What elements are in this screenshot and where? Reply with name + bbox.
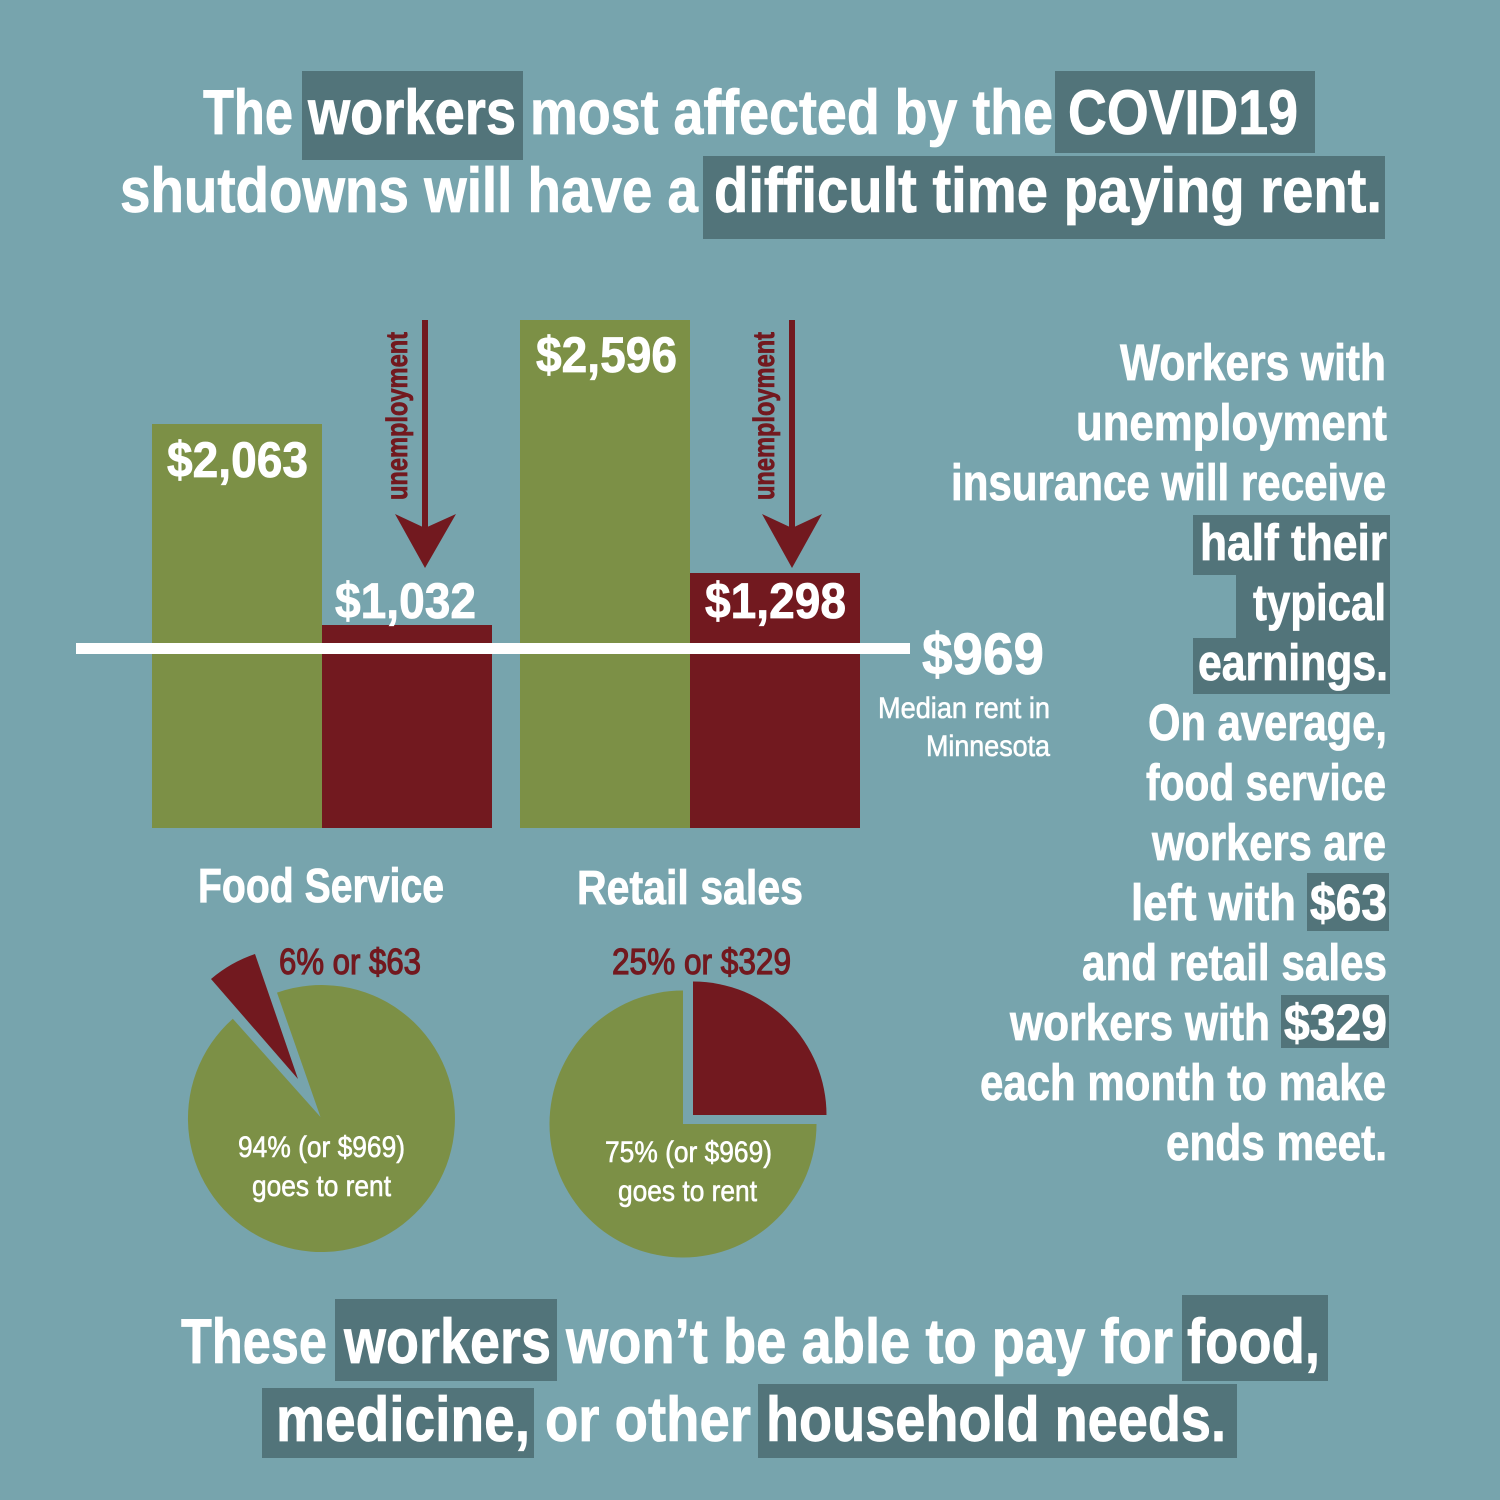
title: The [203,78,293,148]
bar: food service unemployment [322,625,492,828]
pie chart: food service [188,941,455,1252]
text block: unemployment explanation: ends meet. [1166,1114,1387,1171]
text block: unemployment explanation [951,334,1390,1171]
closing statement: household needs. [766,1385,1226,1455]
label: 94% goes to rent: 94% (or $969) [238,1131,405,1164]
text block: unemployment explanation: earnings. [1198,634,1388,691]
text block: unemployment explanation: left with [1131,874,1296,931]
pie slice: 25% left over [693,982,826,1115]
heading: Food Service: Food Service [198,860,444,913]
label: 25% or $329: 25% or $329 [612,941,791,982]
closing statement [181,1295,1328,1458]
title: COVID19 [1068,78,1298,148]
text block: unemployment explanation: workers with [1009,994,1270,1051]
text block: unemployment explanation: half their [1200,514,1387,571]
label: 94% goes to rent [238,1131,405,1203]
arrow label: unemployment (food service): unemployment [381,332,414,500]
text block: unemployment explanation: $329 [1284,994,1387,1051]
text block: unemployment explanation: unemployment [1076,394,1387,451]
label: 94% goes to rent: goes to rent [252,1170,392,1203]
title: most affected by the [530,78,1053,148]
median rent label: $969 [922,622,1044,687]
text block: unemployment explanation: insurance will receive [951,454,1386,511]
closing statement: or other [545,1385,751,1455]
bar: retail sales typical earnings [520,320,690,828]
pie slice: 6% left over [211,954,298,1079]
closing statement: These [181,1307,327,1377]
median rent label: Median rent in [878,692,1050,725]
text block: unemployment explanation: each month to make [980,1054,1386,1111]
value: $2,596: $2,596 [536,327,677,383]
title: difficult time paying rent. [714,156,1382,226]
title: workers [307,78,516,148]
title: shutdowns will have a [120,156,699,226]
value: $1,032: $1,032 [335,573,476,629]
closing statement: medicine, [276,1385,530,1455]
title [120,71,1385,239]
text block: unemployment explanation: $63 [1310,874,1387,931]
median rent line [76,643,910,654]
value: $1,298: $1,298 [705,573,846,629]
label: 75% goes to rent: 75% (or $969) [605,1136,772,1169]
closing statement: food, [1187,1307,1320,1377]
label: 6% or $63: 6% or $63 [279,941,421,982]
text block: unemployment explanation: Workers with [1120,334,1386,391]
value: $2,063: $2,063 [167,432,308,488]
median rent label [878,622,1050,763]
pie slice: 75% rent [550,990,816,1258]
pie slice: 94% rent [188,985,455,1252]
pie chart: retail sales [550,941,826,1258]
text block: unemployment explanation: food service [1146,754,1386,811]
arrow: retail unemployment [762,320,822,568]
label: 75% goes to rent [605,1136,772,1208]
text block: unemployment explanation: workers are [1151,814,1386,871]
text block: unemployment explanation: and retail sales [1082,934,1387,991]
text block: unemployment explanation: typical [1253,574,1386,631]
arrow label: unemployment (retail): unemployment [748,332,781,500]
closing statement: won’t be able to pay for [565,1307,1173,1377]
bar: food service typical earnings [152,424,322,828]
closing statement: workers [343,1307,551,1377]
label: 75% goes to rent: goes to rent [618,1175,758,1208]
bar chart [76,320,910,828]
text block: unemployment explanation: On average, [1148,694,1387,751]
bar: retail sales unemployment [690,573,860,828]
median rent label: Minnesota [926,730,1050,763]
arrow: food service unemployment [395,320,456,568]
heading: Retail sales: Retail sales [577,862,803,915]
